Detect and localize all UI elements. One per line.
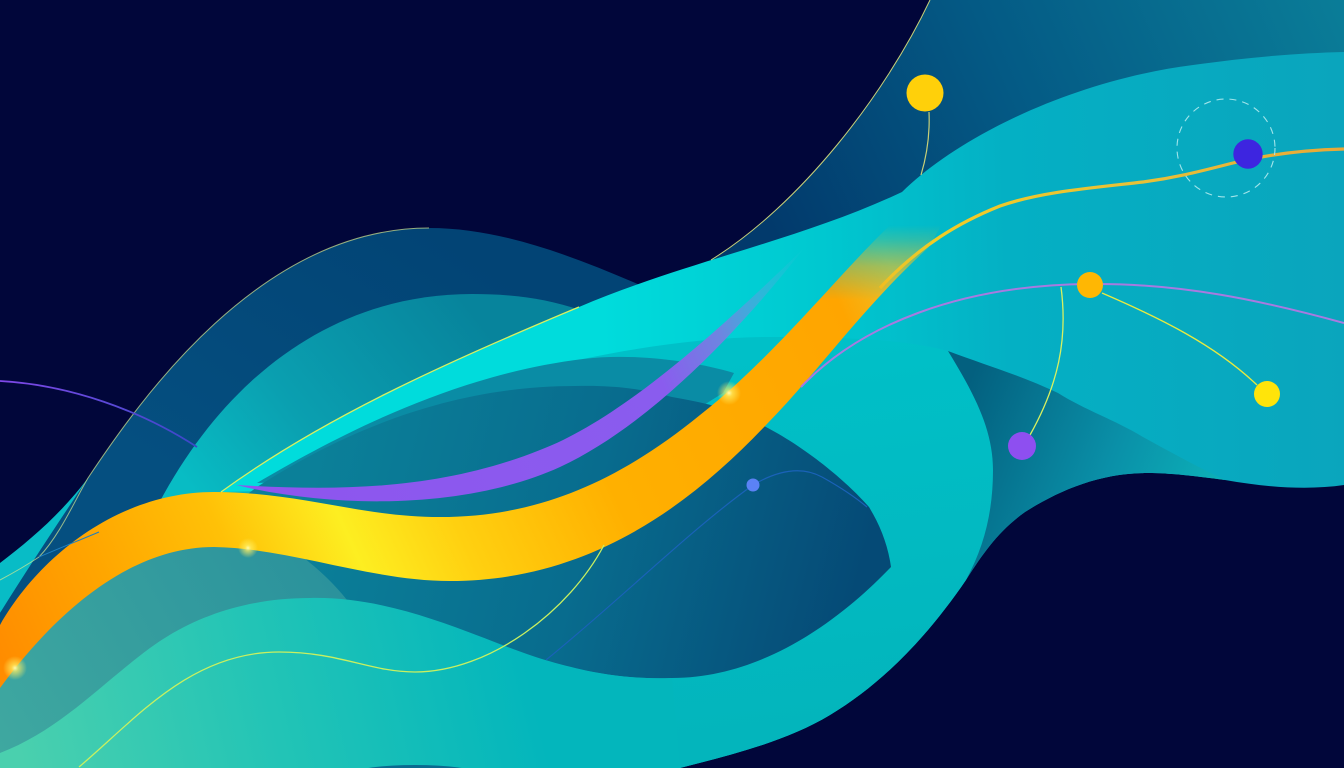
yellow node xyxy=(1254,381,1280,407)
blue thin line left xyxy=(39,532,99,557)
sparkle right xyxy=(717,381,741,405)
purple node xyxy=(1008,432,1036,460)
dark blue hill xyxy=(0,228,700,700)
green teal foreground wave xyxy=(0,598,680,768)
left cyan sliver xyxy=(0,478,88,613)
top right dark teal sweep xyxy=(711,0,1344,400)
yellow orange ribbon xyxy=(0,210,950,688)
stem of top yellow node xyxy=(921,112,929,175)
arch band xyxy=(500,337,993,768)
mid teal band xyxy=(257,357,734,483)
yellow hill outline xyxy=(0,228,429,580)
purple ribbon xyxy=(236,247,805,501)
dashed ring xyxy=(1177,99,1275,197)
yellow line to purple node xyxy=(1030,287,1063,435)
grey green layer xyxy=(0,530,347,768)
orange node xyxy=(1077,272,1103,298)
yellow wave line lower xyxy=(79,545,604,767)
purple line left xyxy=(0,381,197,447)
main cyan ribbon xyxy=(221,52,1344,768)
top yellow node xyxy=(906,74,944,112)
small blue node xyxy=(746,478,760,492)
yellow line on cyan edge xyxy=(221,307,579,492)
yellow outline top right xyxy=(711,0,930,260)
middle teal hill xyxy=(130,294,700,560)
yellow thin line on ribbon tail xyxy=(880,149,1344,288)
bottom dark sliver xyxy=(355,765,475,768)
purple arc line xyxy=(801,284,1344,387)
dark teal wedge xyxy=(948,351,1225,580)
sparkle middle xyxy=(238,538,258,558)
sparkle left xyxy=(3,656,27,680)
yellow line to yellow node xyxy=(1102,293,1257,385)
blue line with node xyxy=(546,471,867,660)
blue node xyxy=(1233,139,1263,169)
dark hollow xyxy=(200,386,891,678)
